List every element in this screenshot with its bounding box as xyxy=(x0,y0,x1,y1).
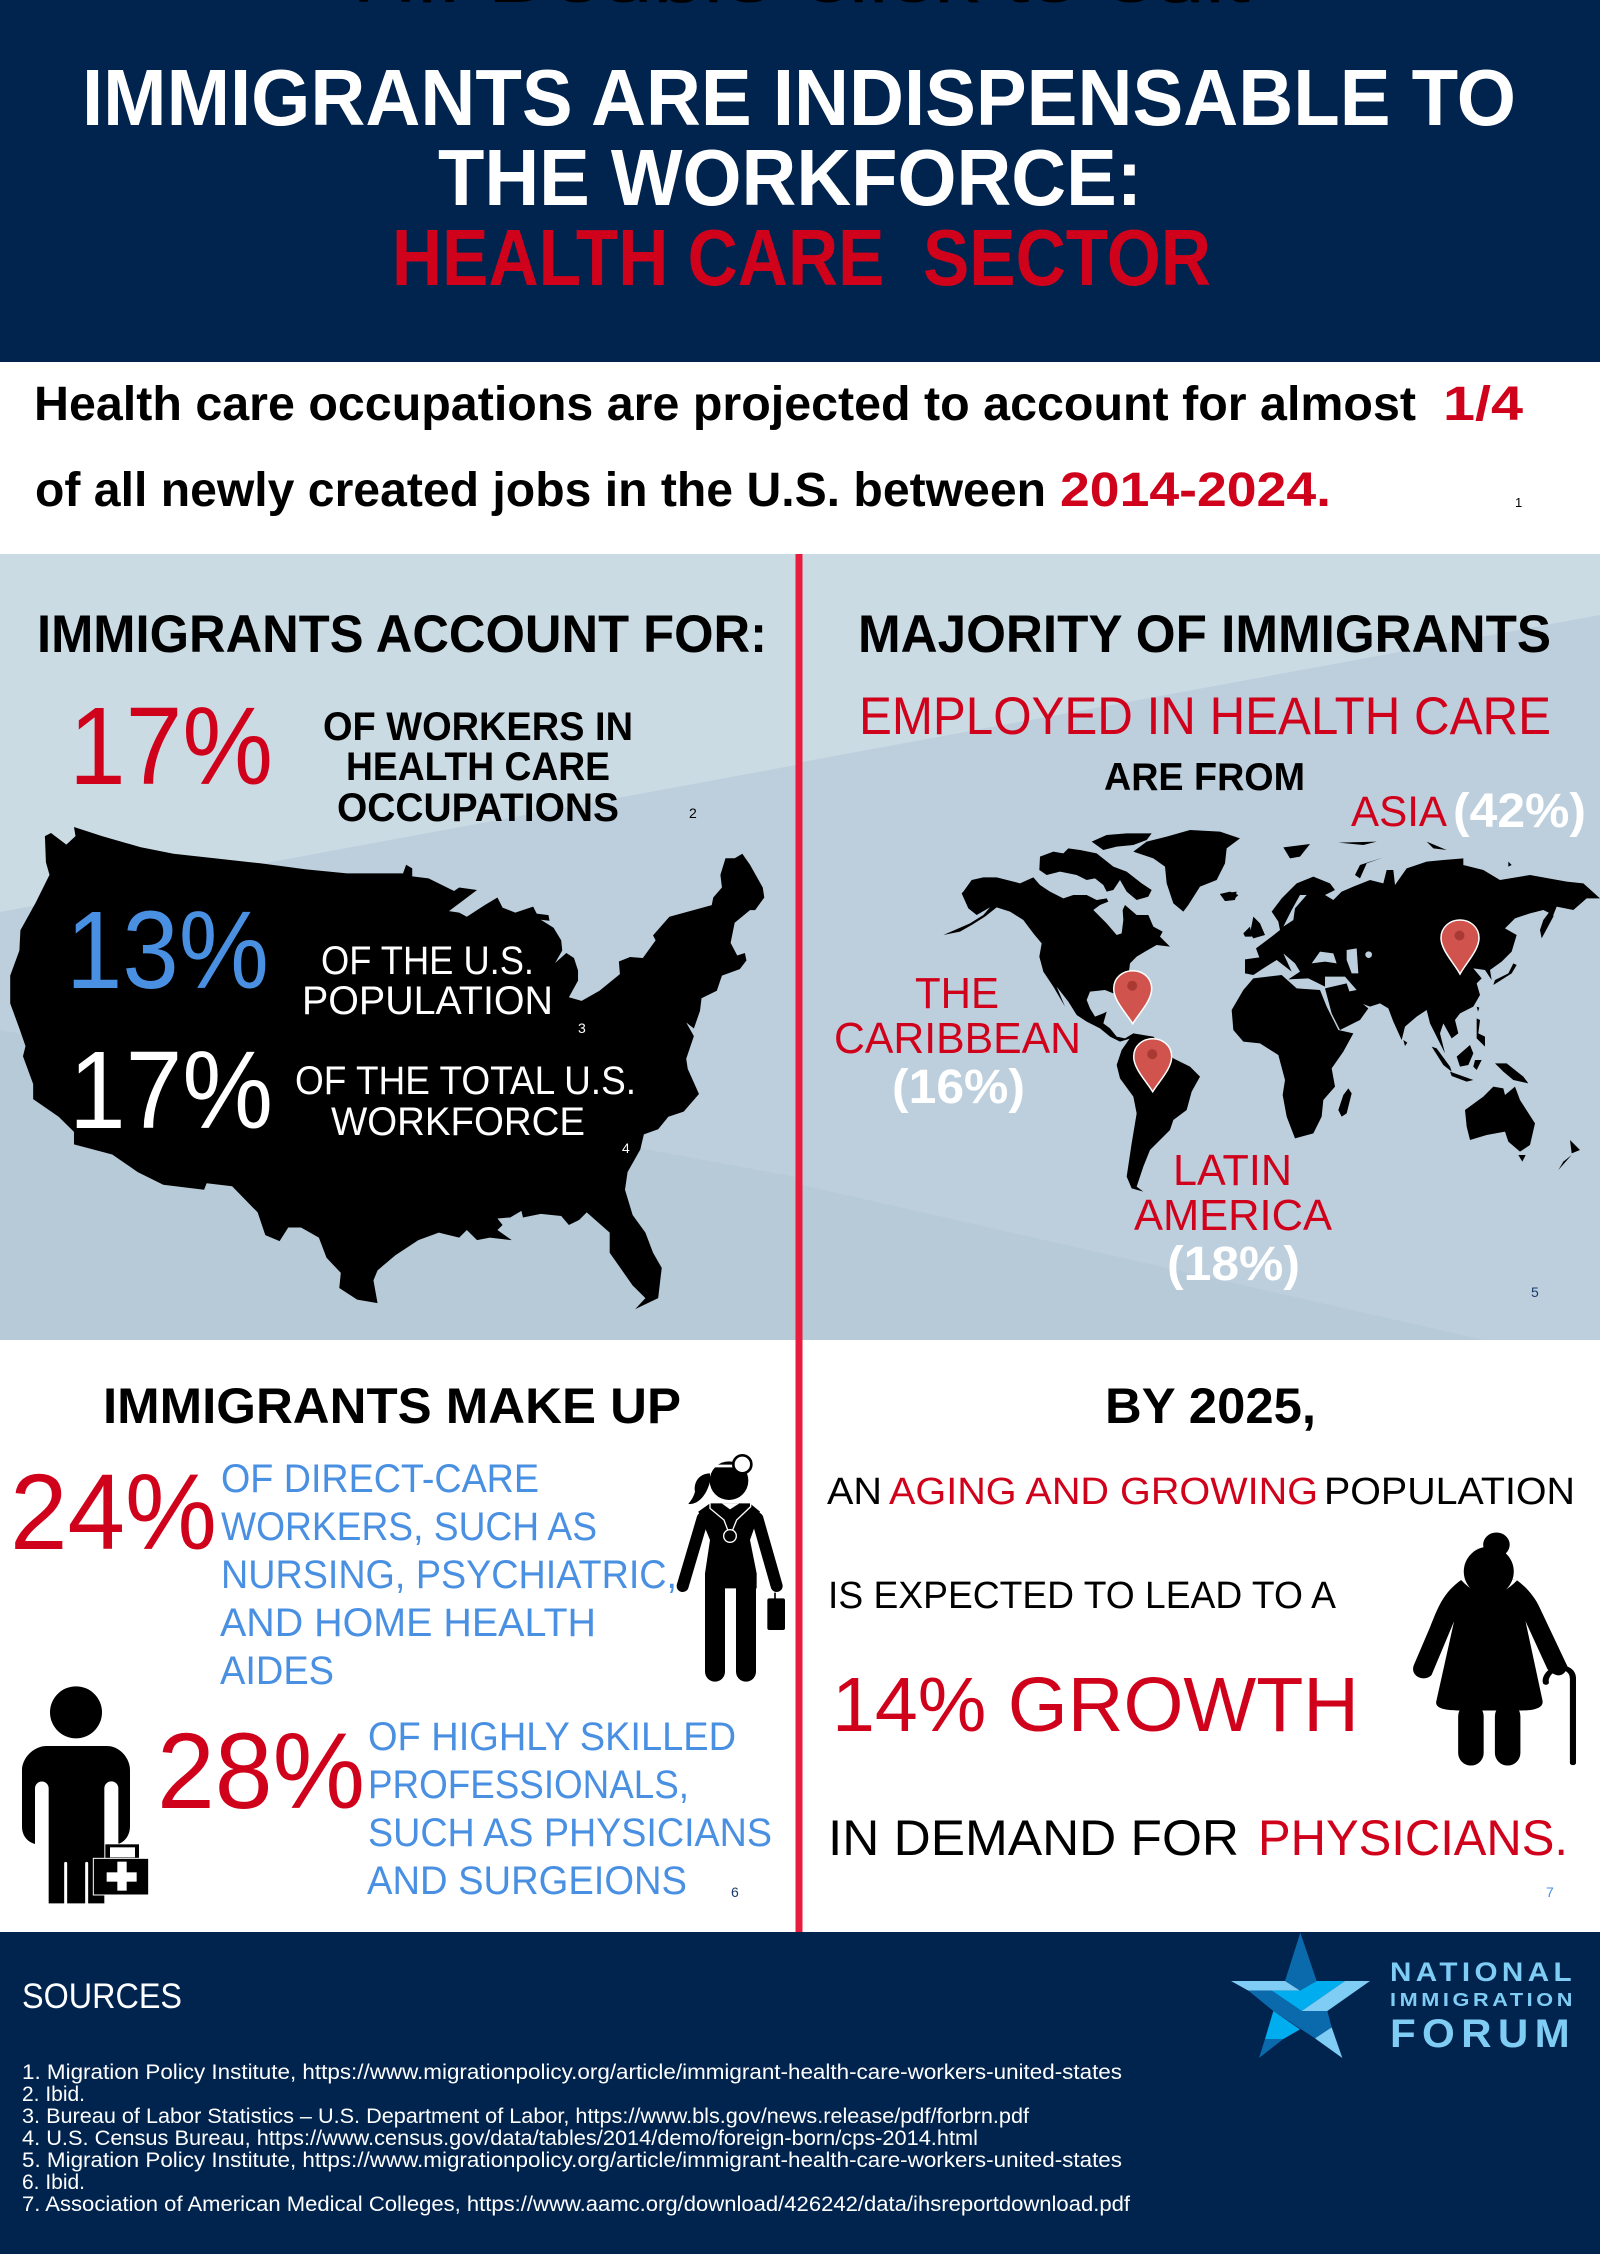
heading: IMMIGRANTS MAKE UP xyxy=(103,1378,681,1434)
stat: 28% highly skilled professionals: 28% xyxy=(157,1710,365,1831)
stat: 28% highly skilled professionals: AND SURGEIONS xyxy=(367,1859,687,1903)
text: in demand for physicians: IN DEMAND FOR xyxy=(828,1810,1239,1866)
sources list: 1. Migration Policy Institute, https://www.migrationpolicy.org/article/immigrant-health-care-workers-united-states xyxy=(22,2061,1122,2084)
stat: 13% of the U.S. population: OF THE U.S. xyxy=(321,939,534,983)
text: aging and growing population: POPULATION xyxy=(1324,1471,1575,1513)
label: Latin America 18% xyxy=(1134,1146,1333,1291)
heading: ARE FROM xyxy=(1104,756,1305,799)
logo: National Immigration Forum: IMMIGRATION xyxy=(1390,1990,1576,2010)
stat: 28% highly skilled professionals: SUCH AS PHYSICIANS xyxy=(368,1811,772,1855)
stat: 17% of the total U.S. workforce: 17% xyxy=(69,1029,273,1152)
label: The Caribbean 16%: THE xyxy=(915,969,999,1018)
stat: 17% of workers in health care: HEALTH CARE xyxy=(346,745,610,789)
intro statement: 1/4 xyxy=(1443,378,1523,431)
intro statement: 1 xyxy=(1515,495,1522,510)
stat: 17% of the total U.S. workforce: WORKFORCE xyxy=(331,1100,585,1144)
stat: 28% highly skilled professionals xyxy=(157,1710,772,1903)
title: IMMIGRANTS ARE INDISPENSABLE TO xyxy=(82,53,1516,142)
label: The Caribbean 16%: (16%) xyxy=(892,1061,1025,1114)
icon: map pin Latin America xyxy=(1134,1039,1172,1092)
sources list: 2. Ibid. xyxy=(22,2083,85,2106)
icon: male doctor with medical case xyxy=(22,1686,149,1904)
map: world silhouette xyxy=(943,830,1600,1192)
panel: majority of immigrants xyxy=(802,554,1600,1340)
label: Asia 42% xyxy=(1351,785,1586,838)
sources heading: SOURCES xyxy=(22,1977,182,2016)
stat: 17% of workers in health care: OCCUPATIONS xyxy=(337,786,619,830)
stat: 17% of the total U.S. workforce: OF THE TOTAL U.S. xyxy=(295,1059,636,1103)
text: aging and growing population: AN xyxy=(827,1471,882,1513)
map: United States silhouette xyxy=(10,827,764,1309)
intro statement xyxy=(0,362,1600,554)
icon: map pin Asia xyxy=(1441,920,1479,974)
stat: 24% direct-care workers: OF DIRECT-CARE xyxy=(221,1457,539,1501)
label: Latin America 18%: (18%) xyxy=(1167,1238,1300,1291)
stat: 24% direct-care workers: AND HOME HEALTH xyxy=(220,1601,596,1645)
label: Latin America 18%: AMERICA xyxy=(1134,1191,1333,1240)
stat: 28% highly skilled professionals: 6 xyxy=(731,1884,739,1900)
sources list: 7. Association of American Medical Colleges, https://www.aamc.org/download/426242/data/ihsreportdownload.pdf xyxy=(22,2193,1130,2216)
title xyxy=(82,53,1516,302)
label: Asia 42%: (42%) xyxy=(1453,785,1586,838)
stat: 17% of the total U.S. workforce xyxy=(69,1029,636,1156)
stat: 28% highly skilled professionals: PROFESSIONALS, xyxy=(368,1763,689,1807)
title: HEALTH CARE SECTOR xyxy=(392,213,1211,302)
label: The Caribbean 16%: CARIBBEAN xyxy=(834,1014,1081,1063)
stat: 13% of the U.S. population: 3 xyxy=(578,1020,586,1036)
icon: star xyxy=(1231,1933,1370,2058)
stat: 17% of the total U.S. workforce: 4 xyxy=(622,1140,630,1156)
logo: National Immigration Forum: NATIONAL xyxy=(1390,1957,1576,1987)
panel: immigrants make up xyxy=(0,1340,796,1932)
sources list: 5. Migration Policy Institute, https://www.migrationpolicy.org/article/immigrant-health-care-workers-united-states xyxy=(22,2149,1122,2172)
label: Asia 42%: ASIA xyxy=(1351,788,1447,836)
sources list xyxy=(22,2061,1130,2216)
text: in demand for physicians: 7 xyxy=(1546,1884,1554,1900)
text: in demand for physicians: PHYSICIANS. xyxy=(1258,1810,1568,1866)
text: aging and growing population xyxy=(827,1471,1575,1513)
icon: female doctor xyxy=(683,1455,785,1672)
icon: map pin Caribbean xyxy=(1114,971,1152,1024)
text: aging and growing population: AGING AND GROWING xyxy=(889,1471,1318,1513)
text: expected to lead: IS EXPECTED TO LEAD TO A xyxy=(828,1575,1337,1617)
heading xyxy=(858,605,1551,799)
stat: 24% direct-care workers: NURSING, PSYCHIATRIC, xyxy=(221,1553,677,1597)
panel: immigrants account for xyxy=(0,554,796,1340)
stat: 17% of workers in health care: OF WORKERS IN xyxy=(323,705,633,749)
stat: 17% of workers in health care xyxy=(69,685,697,830)
text: in demand for physicians xyxy=(828,1810,1568,1900)
heading: MAJORITY OF IMMIGRANTS xyxy=(858,605,1551,664)
stat: 24% direct-care workers: AIDES xyxy=(220,1649,334,1693)
heading: BY 2025, xyxy=(1105,1378,1316,1434)
stat: 13% of the U.S. population: 13% xyxy=(66,889,269,1012)
panel: majority of immigrants: 5 xyxy=(1531,1284,1539,1300)
sources list: 4. U.S. Census Bureau, https://www.census.gov/data/tables/2014/demo/foreign-born/cps-2014.html xyxy=(22,2127,978,2150)
intro statement: Health care occupations are projected to account for almost xyxy=(34,378,1416,431)
title: THE WORKFORCE: xyxy=(438,133,1142,222)
label: The Caribbean 16% xyxy=(834,969,1081,1114)
stat: 17% of workers in health care: 17% xyxy=(69,685,273,808)
logo: National Immigration Forum xyxy=(1231,1933,1576,2058)
icon: elderly woman with cane xyxy=(1413,1532,1573,1766)
stat: 24% direct-care workers xyxy=(10,1451,677,1693)
stat: 13% of the U.S. population xyxy=(66,889,586,1036)
stat: 13% of the U.S. population: POPULATION xyxy=(302,979,553,1023)
heading: IMMIGRANTS ACCOUNT FOR: xyxy=(37,605,767,664)
footer xyxy=(0,1932,1600,2254)
header band xyxy=(0,0,1600,362)
center divider xyxy=(796,554,802,1932)
label: Latin America 18%: LATIN xyxy=(1173,1146,1292,1195)
sources list: 3. Bureau of Labor Statistics – U.S. Department of Labor, https://www.bls.gov/news.release/pdf/forbrn.pdf xyxy=(22,2105,1029,2128)
heading: EMPLOYED IN HEALTH CARE xyxy=(859,687,1551,746)
stat: 14% growth: 14% GROWTH xyxy=(832,1662,1359,1748)
logo: National Immigration Forum: FORUM xyxy=(1390,2012,1576,2056)
stat: 17% of workers in health care: 2 xyxy=(689,805,697,821)
sources list: 6. Ibid. xyxy=(22,2171,85,2194)
intro statement: of all newly created jobs in the U.S. between xyxy=(35,464,1046,517)
intro statement: 2014-2024. xyxy=(1060,464,1331,517)
panel: by 2025 xyxy=(802,1340,1600,1932)
stat: 24% direct-care workers: 24% xyxy=(10,1451,217,1572)
stat: 24% direct-care workers: WORKERS, SUCH AS xyxy=(221,1505,597,1549)
stat: 28% highly skilled professionals: OF HIGHLY SKILLED xyxy=(368,1715,736,1759)
